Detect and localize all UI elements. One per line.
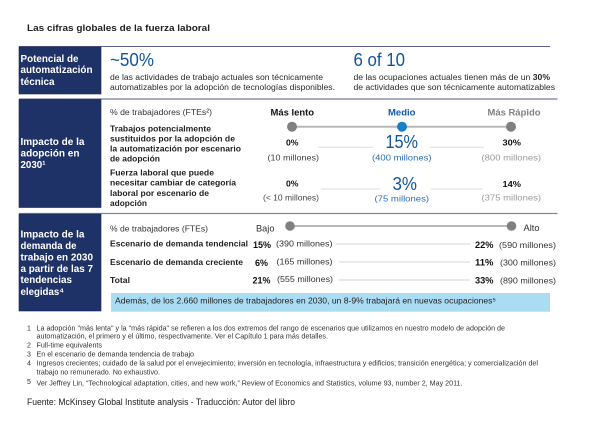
row: trabajos sustituidos: (400 millones) (372, 153, 432, 163)
footnotes: 2 (27, 343, 31, 350)
footnotes: 1 (27, 325, 31, 332)
row: trabajos sustituidos: 0% (286, 138, 299, 148)
row: trabajos sustituidos: sustituidos por la adopción de (110, 134, 235, 144)
row: trabajos sustituidos: (800 millones) (482, 153, 541, 163)
panel: potencial de automatización técnica: técnica (20, 77, 55, 88)
row: demanda creciente: 6% (255, 258, 269, 269)
demand slider: Bajo (256, 224, 274, 234)
title: Las cifras globales de la fuerza laboral (27, 23, 210, 34)
row: demanda tendencial: Escenario de demanda tendencial (110, 239, 248, 249)
demand slider: Alto (524, 223, 540, 234)
panel: potencial de automatización técnica (19, 47, 101, 94)
footnotes: Ingresos crecientes; cuidado de la salud por el envejecimiento; inversión en tecnología, infraestructura y edificios; transición energética; y comercialización del (36, 361, 538, 368)
panel: impacto de la adopción en 2030: 2030¹ (20, 160, 46, 171)
row: total: 33% (475, 276, 494, 286)
stat: 6 of 10 (354, 50, 555, 92)
row: demanda tendencial: 22% (475, 240, 494, 251)
row: fuerza laboral que cambia de categoría: necesitar cambiar de categoría (110, 178, 236, 188)
row: fuerza laboral que cambia de categoría: 3% (392, 174, 417, 194)
panel: impacto de la adopción en 2030: adopción en (20, 149, 80, 160)
row: demanda creciente (110, 256, 556, 269)
panel: impacto de la demanda de trabajo (19, 214, 101, 311)
panel: impacto de la demanda de trabajo: trabajo en 2030 (20, 253, 93, 264)
footnotes: Full-time equivalents (36, 343, 102, 350)
demand slider (256, 221, 540, 234)
stat: 6 of 10: de las ocupaciones actuales tienen más de un 30% (354, 73, 550, 82)
stat: ~50%: automatizables por la adopción de tecnologías disponibles. (110, 83, 335, 92)
row: trabajos sustituidos: 15% (386, 132, 418, 152)
scenario slider (270, 108, 541, 132)
panel: impacto de la demanda de trabajo: Impacto de la (20, 230, 85, 241)
footnotes: trabajo no remunerado. No exhaustivo. (36, 369, 160, 376)
axis label: % de trabajadores (FTEs²): % de trabajadores (FTEs²) (110, 107, 212, 117)
row: fuerza laboral que cambia de categoría (110, 168, 541, 208)
row: total: (555 millones) (277, 274, 333, 284)
callout: nuevas ocupaciones (111, 293, 550, 312)
row: trabajos sustituidos: la automatización por escenario (110, 144, 241, 154)
row: demanda creciente: 11% (475, 258, 494, 268)
stat: ~50%: ~50% (110, 50, 154, 70)
footnotes: Ver Jeffrey Lin, “Technological adaptation, cities, and new work,” Review of Economics and Statistics, volume 93, number 2, May 2011. (36, 381, 463, 388)
stat: ~50%: de las actividades de trabajo actuales son técnicamente (110, 73, 324, 82)
panel: impacto de la demanda de trabajo: a partir de las 7 (20, 264, 93, 275)
stat: 6 of 10: de actividades que son técnicamente automatizables (354, 83, 555, 92)
row: total (110, 274, 556, 286)
source: Fuente: McKinsey Global Institute analysis - Traducción: Autor del libro (27, 397, 295, 407)
axis label: % de trabajadores (FTEs): % de trabajadores (FTEs) (110, 224, 208, 234)
row: fuerza laboral que cambia de categoría: (75 millones) (374, 194, 429, 204)
row: fuerza laboral que cambia de categoría: 0% (286, 179, 299, 189)
row: fuerza laboral que cambia de categoría: 14% (502, 179, 521, 189)
row: demanda creciente: (300 millones) (500, 258, 556, 268)
scenario slider: Medio (388, 108, 416, 118)
footnotes: 3 (27, 351, 31, 358)
row: demanda creciente: Escenario de demanda creciente (110, 257, 243, 267)
footnotes: La adopción "más lenta" y la "más rápida" se refieren a los dos extremos del rango de escenarios que utilizamos en nuestro modelo de adopción de (36, 325, 505, 332)
panel: impacto de la adopción en 2030: Impacto de la (20, 137, 85, 148)
stat: ~50% (110, 50, 335, 92)
row: trabajos sustituidos: 30% (502, 138, 521, 148)
callout: nuevas ocupaciones: Además, de los 2.660 millones de trabajadores en 2030, un 8-9% trabajará en nuevas ocupaciones⁵ (115, 296, 496, 306)
panel: potencial de automatización técnica: automatización (20, 65, 92, 76)
row: trabajos sustituidos: Trabajos potencialmente (110, 124, 211, 134)
row: fuerza laboral que cambia de categoría: adopción (110, 198, 147, 208)
scenario slider: Más Rápido (488, 108, 541, 118)
footnotes: 4 (27, 361, 31, 368)
row: fuerza laboral que cambia de categoría: (375 millones) (482, 193, 541, 203)
row: total: Total (110, 275, 130, 285)
scenario slider: Más lento (270, 108, 315, 118)
panel: potencial de automatización técnica: Potencial de (20, 54, 79, 65)
row: fuerza laboral que cambia de categoría: laboral por escenario de (110, 188, 209, 198)
row: demanda tendencial: (590 millones) (499, 240, 556, 250)
panel: impacto de la adopción en 2030 (19, 100, 101, 208)
row: fuerza laboral que cambia de categoría: Fuerza laboral que puede (110, 168, 214, 178)
row: demanda tendencial: 15% (253, 240, 272, 251)
footnotes: 5 (27, 379, 31, 386)
panel: impacto de la demanda de trabajo: demanda de (20, 241, 77, 252)
footnotes: En el escenario de demanda tendencia de trabajo (36, 351, 194, 358)
panel: impacto de la demanda de trabajo: tendencias (20, 275, 72, 286)
row: demanda tendencial: (390 millones) (276, 238, 333, 248)
row: demanda creciente: (165 millones) (276, 256, 333, 266)
panel: impacto de la demanda de trabajo: elegidas⁴ (20, 287, 64, 298)
stat: 6 of 10: 6 of 10 (354, 50, 405, 70)
row: fuerza laboral que cambia de categoría: (< 10 millones) (263, 193, 319, 203)
row: trabajos sustituidos: (10 millones) (268, 153, 319, 163)
row: total: 21% (252, 276, 271, 286)
row: total: (890 millones) (500, 276, 556, 286)
footnotes (27, 325, 538, 388)
row: trabajos sustituidos (110, 124, 541, 163)
footnotes: automatización, el primero y el último, respectivamente. Ver el Capítulo 1 para más detalles. (36, 334, 328, 341)
row: trabajos sustituidos: de adopción (110, 153, 160, 163)
row: demanda tendencial (110, 238, 556, 251)
